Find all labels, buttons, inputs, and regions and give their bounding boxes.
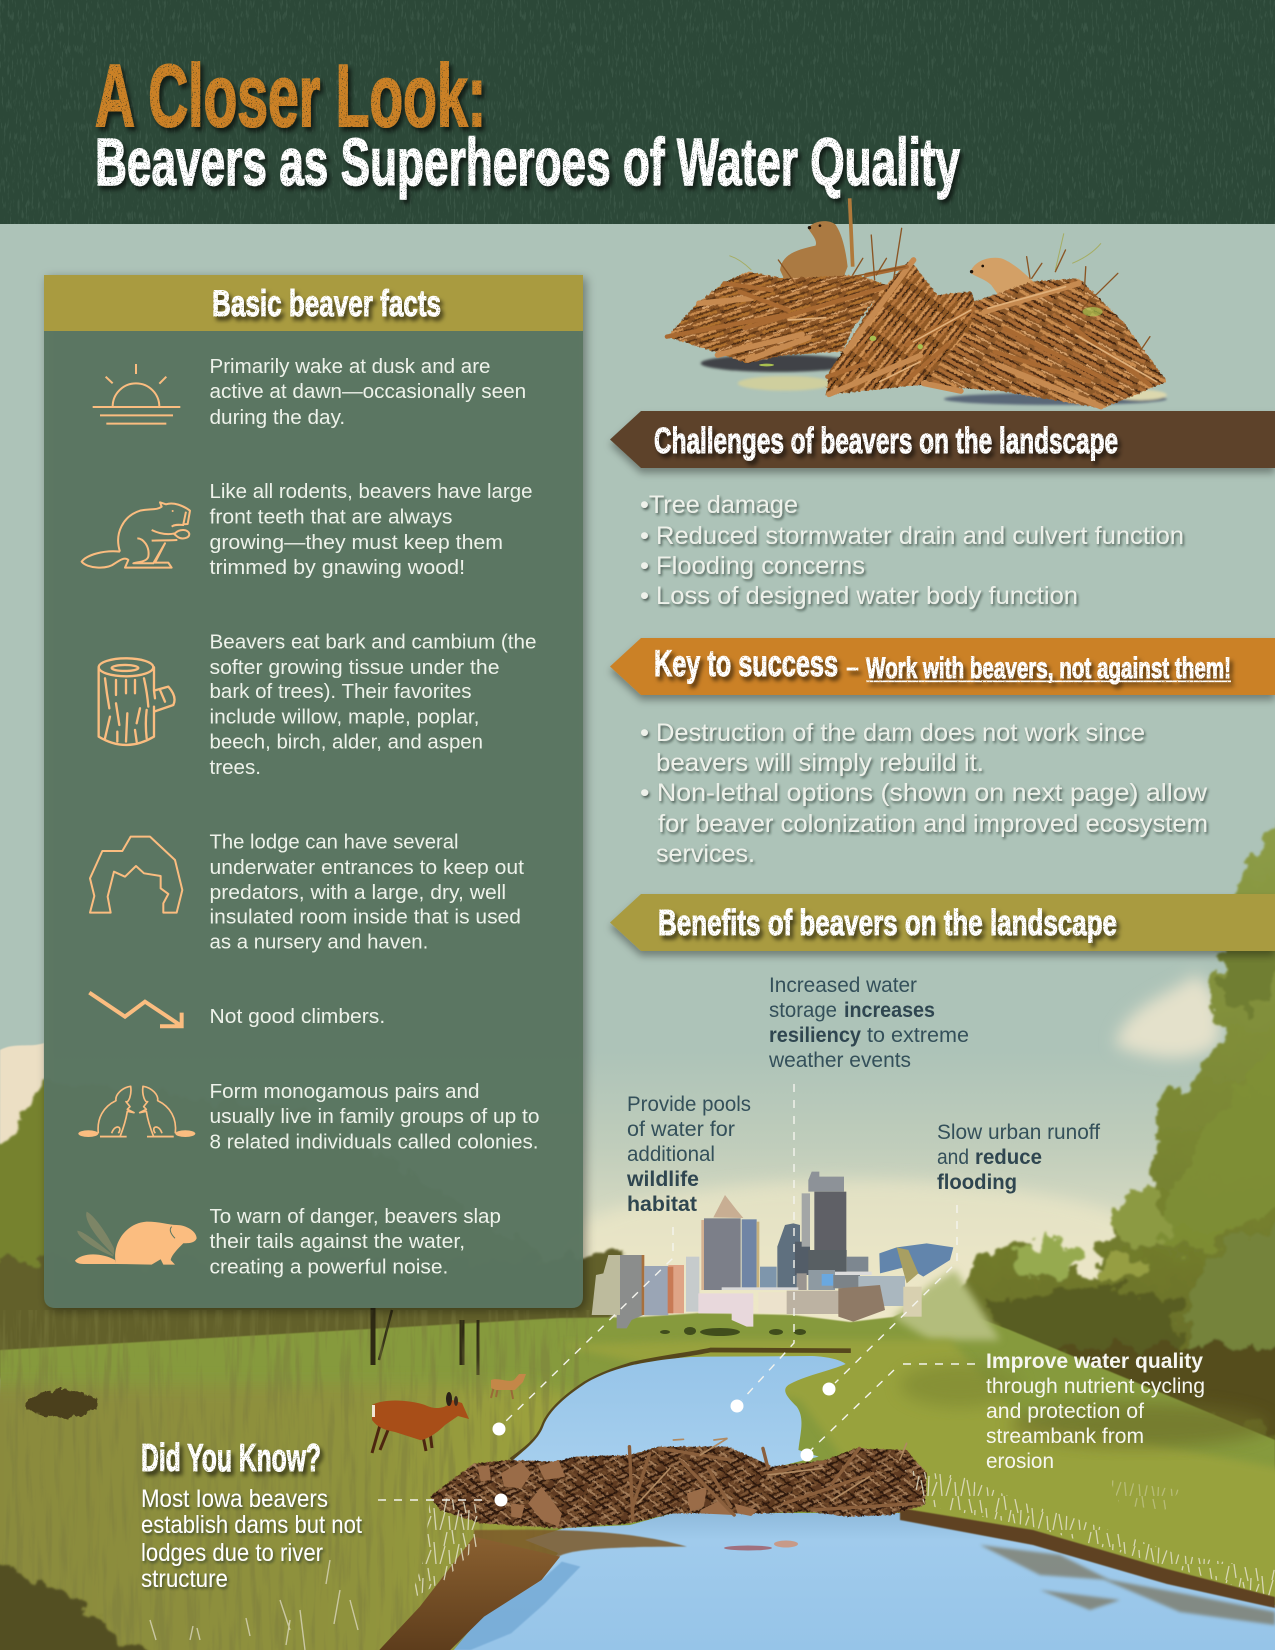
text: lodge: insulated room inside that is used <box>210 905 521 928</box>
text: family: Form monogamous pairs and <box>210 1080 480 1103</box>
banner: benefits <box>610 894 1275 951</box>
beaver lodge illustration <box>667 198 1167 408</box>
callout: wildlife habitat: wildlife <box>626 1168 699 1191</box>
callout: wildlife habitat: Provide pools <box>627 1093 751 1116</box>
deep water strip <box>454 1562 580 1650</box>
did you know: Did You Know? <box>141 1437 321 1480</box>
mud patch <box>26 1390 98 1418</box>
text: teeth <box>210 480 532 579</box>
dam chunks <box>477 1460 758 1527</box>
text: diet: softer growing tissue under the <box>210 656 500 679</box>
did you know <box>141 1437 362 1593</box>
text: family: usually live in family groups of up to <box>210 1105 540 1128</box>
text: activity: during the day. <box>210 406 345 429</box>
text: lodge: underwater entrances to keep out <box>210 856 524 879</box>
callout: water storage: storage <box>769 999 837 1022</box>
dam <box>430 1438 927 1528</box>
grassy meadow <box>0 1270 1275 1650</box>
title: A Closer Look: <box>95 46 486 145</box>
callout: flooding: Slow urban runoff <box>937 1121 1100 1144</box>
callout: flooding: and <box>937 1146 969 1169</box>
big deer <box>372 1392 469 1453</box>
small deer <box>491 1374 526 1399</box>
callout: water storage: Increased water <box>769 974 917 997</box>
callout: flooding: reduce <box>975 1146 1042 1169</box>
text: diet: trees. <box>210 756 261 779</box>
list: challenges: • Loss of designed water body function <box>640 582 1078 610</box>
reeds <box>729 233 1101 270</box>
text: diet: beech, birch, alder, and aspen <box>210 731 483 754</box>
tree trunks <box>373 1308 478 1375</box>
callout: water storage: to extreme <box>867 1024 969 1047</box>
icon: log <box>99 658 175 745</box>
text: activity: Primarily wake at dusk and are <box>210 355 490 378</box>
did you know: Most Iowa beavers <box>141 1485 328 1513</box>
callout: water storage: resiliency <box>769 1024 861 1047</box>
panel heading: Basic beaver facts <box>212 283 441 324</box>
text: diet: bark of trees). Their favorites <box>210 680 472 703</box>
list: key to success: services. <box>656 840 755 868</box>
callout: water storage <box>768 974 969 1072</box>
text: lodge: as a nursery and haven. <box>210 930 428 954</box>
text: diet <box>210 631 536 779</box>
cloud right <box>1115 975 1220 1058</box>
callout: flooding <box>937 1121 1100 1194</box>
list: challenges: •Tree damage <box>640 491 798 519</box>
text: family: 8 related individuals called colonies. <box>210 1130 538 1153</box>
vertical stick <box>850 198 853 267</box>
callout: wildlife habitat: habitat <box>627 1193 697 1216</box>
callout: wildlife habitat: of water for <box>627 1118 735 1141</box>
lower river <box>454 1513 1275 1650</box>
swimming beaver <box>724 1540 798 1550</box>
icon: lodge <box>90 837 182 913</box>
callout: water quality: streambank from <box>986 1425 1144 1448</box>
beaver 2 <box>970 258 1035 302</box>
callout leader lines and dots <box>378 1084 975 1506</box>
water under lodge <box>701 355 1167 405</box>
text: climbers: Not good climbers. <box>210 1005 385 1028</box>
did you know: lodges due to river <box>141 1539 323 1567</box>
text: lodge <box>210 831 524 954</box>
text: tail slap: their tails against the water, <box>210 1230 465 1253</box>
list: challenges <box>640 491 1184 610</box>
panel heading <box>44 275 583 331</box>
upper bank edge <box>511 1350 851 1460</box>
text: teeth: front teeth that are always <box>210 506 452 528</box>
list: key to success <box>640 719 1208 868</box>
text: activity: active at dawn—occasionally seen <box>210 380 526 403</box>
text: teeth: Like all rodents, beavers have large <box>210 480 532 503</box>
list: challenges: • Reduced stormwater drain and culvert function <box>640 522 1184 550</box>
list: challenges: • Flooding concerns <box>640 552 865 580</box>
banner: key to success: – <box>846 651 859 684</box>
callout: flooding: flooding <box>937 1171 1017 1194</box>
icon: beaver gnawing <box>82 502 190 568</box>
panel: basic beaver facts <box>44 275 583 1308</box>
icon: beaver slapping tail <box>75 1212 197 1265</box>
text: diet: include willow, maple, poplar, <box>210 705 480 728</box>
grass tufts <box>150 1470 1275 1650</box>
callout: wildlife habitat: additional <box>627 1143 715 1166</box>
callout: wildlife habitat <box>626 1093 751 1216</box>
sticks highlights <box>788 287 1157 382</box>
text: tail slap: creating a powerful noise. <box>210 1256 448 1279</box>
grass bits <box>759 307 1103 366</box>
callout: water storage: weather events <box>768 1049 911 1072</box>
city skyline <box>592 1172 953 1328</box>
text: family <box>210 1080 540 1153</box>
callout: water storage: increases <box>844 999 935 1022</box>
text: lodge: predators, with a large, dry, well <box>210 881 506 904</box>
text: lodge: The lodge can have several <box>210 831 458 854</box>
list: key to success: • Non-lethal options (shown on next page) allow <box>640 779 1208 807</box>
trees right <box>933 805 1275 1520</box>
banner: key to success: Key to success <box>654 643 838 684</box>
mud slope <box>379 1537 560 1650</box>
text: activity <box>210 355 526 429</box>
callout: water quality: erosion <box>986 1450 1054 1473</box>
reflections right <box>980 1545 1275 1625</box>
callout: water quality <box>986 1350 1205 1473</box>
text: teeth: trimmed by gnawing wood! <box>210 556 465 579</box>
icon: beaver pair <box>78 1086 195 1137</box>
icon: downward arrow <box>89 993 182 1026</box>
trees far left <box>0 1075 620 1380</box>
text: teeth: growing—they must keep them <box>210 531 503 554</box>
upper pool <box>511 1356 846 1470</box>
list: key to success: beavers will simply rebuild it. <box>656 749 984 777</box>
header band <box>0 0 1275 224</box>
thin sticks <box>778 228 1150 352</box>
callout: water quality: Improve water quality <box>986 1350 1203 1373</box>
callout: water quality: and protection of <box>986 1400 1144 1423</box>
callout: water quality: through nutrient cycling <box>986 1375 1205 1398</box>
brown reflection <box>474 1530 687 1557</box>
did you know: establish dams but not <box>141 1511 362 1539</box>
text: diet: Beavers eat bark and cambium (the <box>210 631 536 654</box>
banner: challenges <box>610 411 1275 468</box>
banner: key to success <box>610 638 1275 695</box>
list: key to success: • Destruction of the dam does not work since <box>640 719 1145 747</box>
lodge pile <box>667 260 1167 408</box>
cloud left <box>0 1043 44 1150</box>
text: tail slap <box>210 1205 501 1279</box>
title <box>95 46 960 200</box>
streak texture <box>0 1310 590 1650</box>
beaver 1 <box>780 221 848 288</box>
did you know: structure <box>141 1565 228 1593</box>
list: key to success: for beaver colonization and improved ecosystem <box>658 810 1208 838</box>
text: tail slap: To warn of danger, beavers slap <box>210 1205 501 1228</box>
right bank mud <box>900 1508 1275 1608</box>
dark shrubs bottom-left <box>0 1560 160 1650</box>
icon: sunset <box>93 364 180 424</box>
large logs <box>699 260 1101 407</box>
